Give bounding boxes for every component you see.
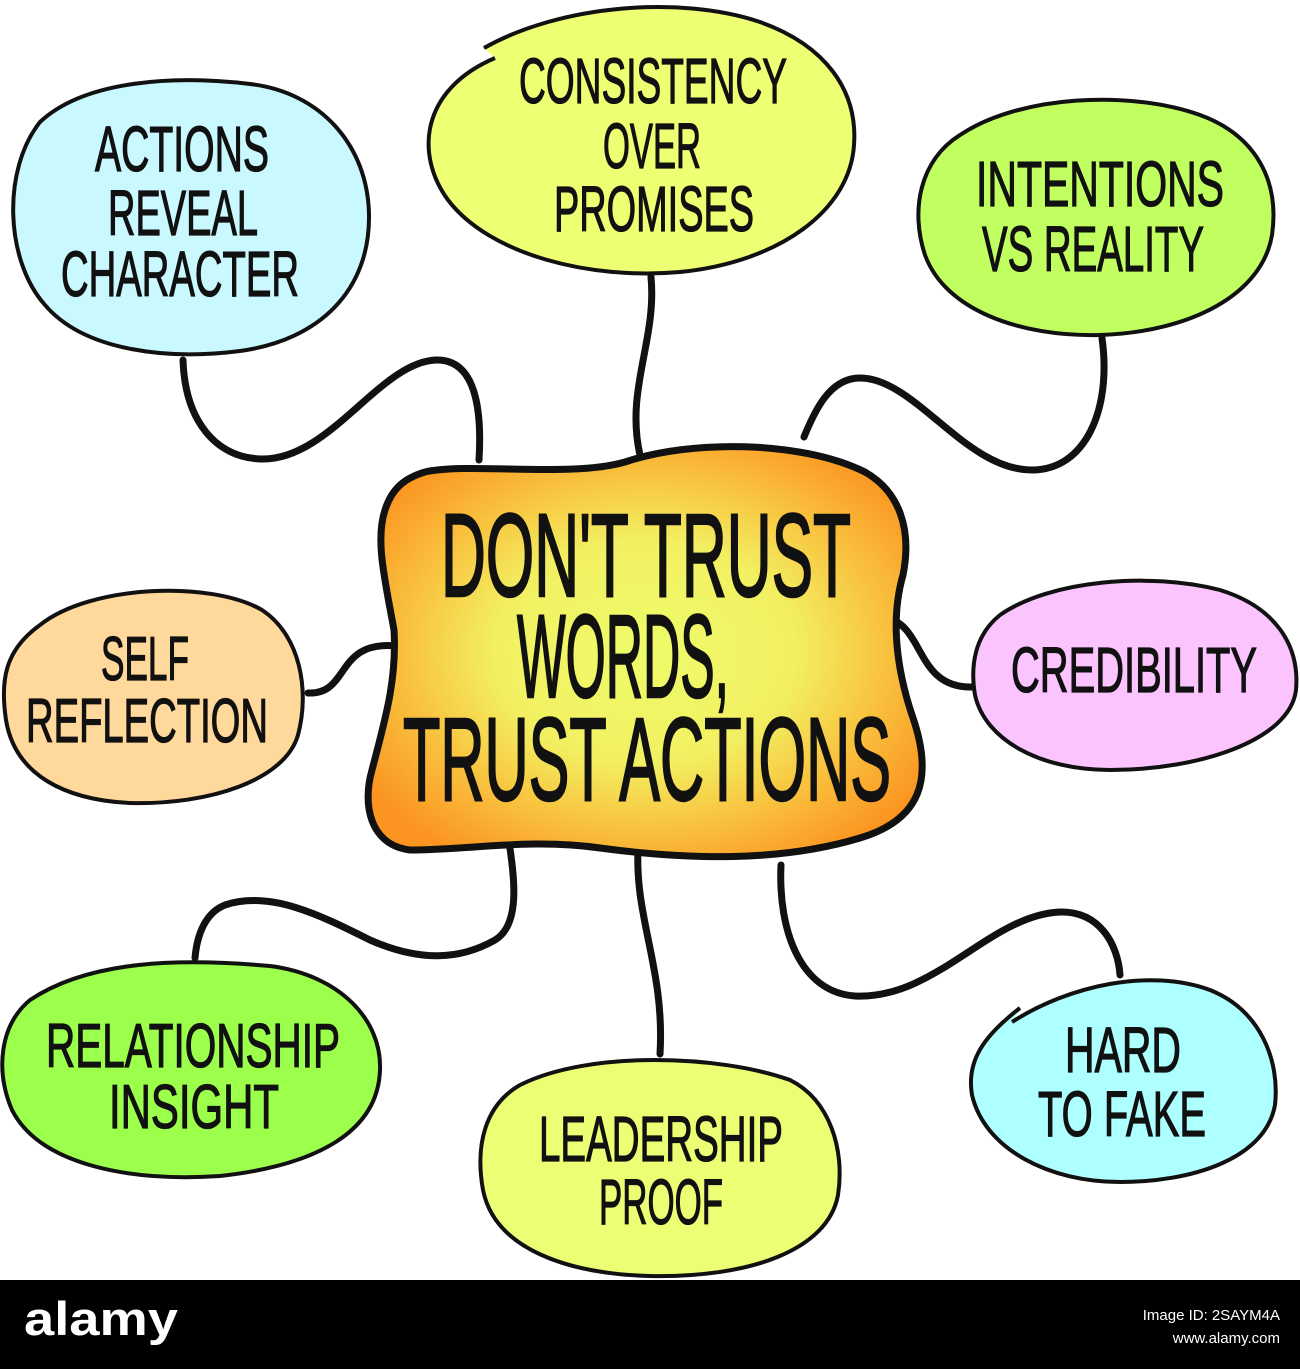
site url: www.alamy.com bbox=[1172, 1330, 1280, 1347]
node: leadership proof bbox=[480, 1060, 840, 1276]
node: self reflection: SELF bbox=[101, 625, 189, 694]
node: relationship insight: INSIGHT bbox=[109, 1073, 279, 1142]
node: leadership proof: LEADERSHIP bbox=[539, 1103, 783, 1175]
node: relationship insight bbox=[2, 962, 380, 1177]
node: hard to fake: TO FAKE bbox=[1038, 1078, 1206, 1150]
central topic: WORDS, bbox=[517, 591, 729, 723]
node: hard to fake: HARD bbox=[1065, 1014, 1181, 1086]
image id: Image ID: 2SAYM4A bbox=[1143, 1307, 1280, 1324]
node: consistency over promises: OVER bbox=[603, 110, 701, 182]
node: self reflection bbox=[4, 591, 303, 803]
logo: alamy bbox=[24, 1292, 178, 1345]
central topic: DON'T TRUST bbox=[441, 490, 851, 622]
connectors bbox=[183, 277, 1120, 1054]
footer bar bbox=[0, 1280, 1300, 1369]
node: leadership proof: PROOF bbox=[599, 1166, 723, 1238]
node: consistency over promises: PROMISES bbox=[554, 173, 754, 245]
central topic bbox=[368, 447, 922, 857]
node: consistency over promises bbox=[429, 7, 854, 273]
node: actions reveal character bbox=[13, 80, 369, 354]
node: relationship insight: RELATIONSHIP bbox=[46, 1012, 340, 1081]
node: actions reveal character: CHARACTER bbox=[61, 238, 299, 310]
node: credibility bbox=[973, 581, 1296, 770]
node: consistency over promises: CONSISTENCY bbox=[519, 45, 787, 117]
node: intentions vs reality bbox=[918, 100, 1273, 335]
node: actions reveal character: REVEAL bbox=[108, 177, 258, 249]
node: self reflection: REFLECTION bbox=[26, 687, 268, 756]
node: actions reveal character: ACTIONS bbox=[95, 113, 269, 185]
node: hard to fake bbox=[971, 980, 1276, 1182]
